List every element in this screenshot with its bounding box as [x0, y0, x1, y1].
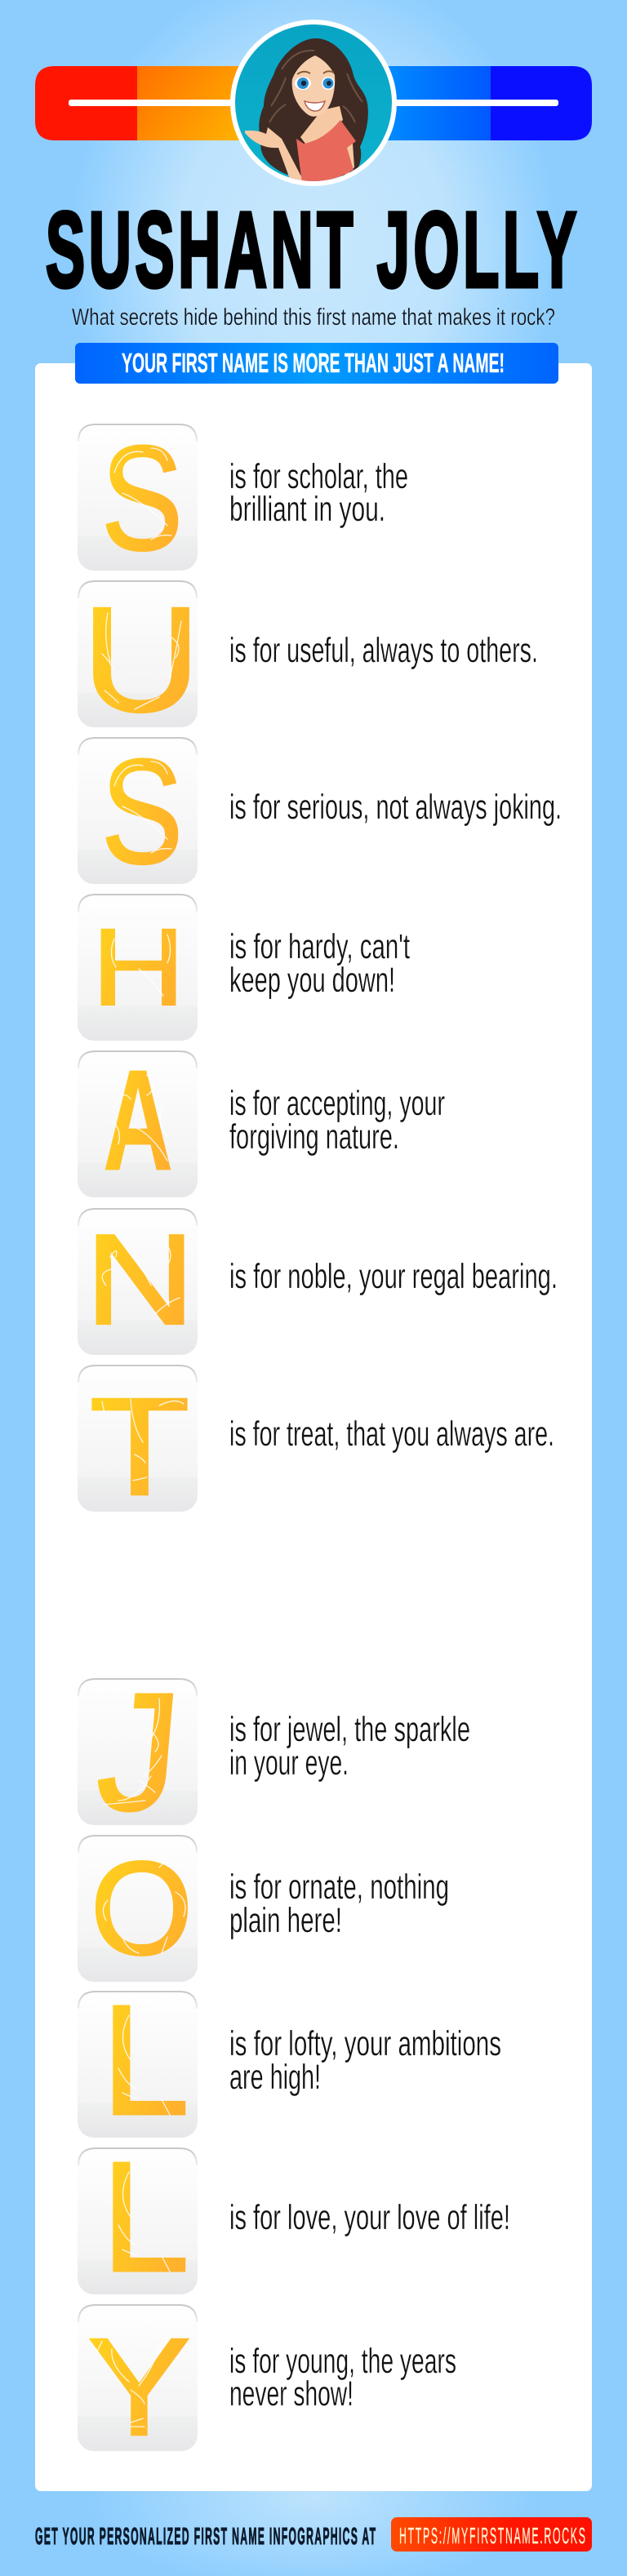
row: H hardy: keep you down!: [229, 961, 395, 1000]
row: S serious: S: [101, 729, 183, 895]
row: L lofty: is for lofty, your ambitions: [229, 2024, 501, 2063]
row: S scholar: S: [101, 415, 183, 581]
footer link button: HTTPS://MYFIRSTNAME.ROCKS: [399, 2522, 585, 2548]
row: H hardy: H: [91, 906, 185, 1028]
row: S scholar: is for scholar, the: [229, 457, 408, 496]
row: U useful: U: [82, 576, 201, 743]
row: O ornate: plain here!: [229, 1901, 342, 1940]
row: H hardy: [78, 894, 410, 1041]
panel: white content card: [35, 363, 592, 2491]
footer call to action: GET YOUR PERSONALIZED FIRST NAME INFOGRAPHICS AT: [35, 2523, 376, 2550]
row: L love: L: [101, 2130, 189, 2305]
row: J jewel: J: [91, 1659, 187, 1845]
row: Y young: is for young, the years: [229, 2342, 456, 2381]
row: L lofty: L: [101, 1973, 189, 2148]
row: J jewel: [78, 1659, 470, 1845]
row: S serious: [78, 729, 562, 895]
row: A accepting: is for accepting, your: [229, 1084, 445, 1123]
row: Y young: never show!: [229, 2374, 354, 2414]
row: A accepting: forgiving nature.: [229, 1117, 399, 1157]
row: N noble: N: [85, 1207, 195, 1352]
row: L lofty: [78, 1973, 501, 2148]
row: T treat: T: [89, 1369, 190, 1524]
row: Y young: Y: [87, 2310, 191, 2465]
row: L love: [78, 2130, 510, 2305]
row: H hardy: is for hardy, can't: [229, 927, 410, 966]
row: Y young: [78, 2304, 456, 2465]
banner: [75, 343, 558, 384]
row: N noble: [78, 1207, 558, 1355]
row: J jewel: in your eye.: [229, 1743, 349, 1783]
row: U useful: [78, 576, 538, 743]
row: T treat: [78, 1365, 554, 1524]
row: L lofty: are high!: [229, 2058, 321, 2097]
row: O ornate: is for ornate, nothing: [229, 1868, 449, 1907]
row: A accepting: A: [103, 1040, 173, 1200]
row: S scholar: [78, 415, 408, 581]
title: SUSHANT JOLLY: [46, 190, 576, 310]
row: O ornate: O: [90, 1835, 193, 1983]
header colour bar: [35, 66, 592, 140]
row: O ornate: [78, 1835, 449, 1983]
row: S scholar: brilliant in you.: [229, 490, 385, 529]
row: A accepting: [78, 1040, 445, 1200]
row: J jewel: is for jewel, the sparkle: [229, 1710, 470, 1749]
icon: woman avatar: [230, 20, 397, 186]
